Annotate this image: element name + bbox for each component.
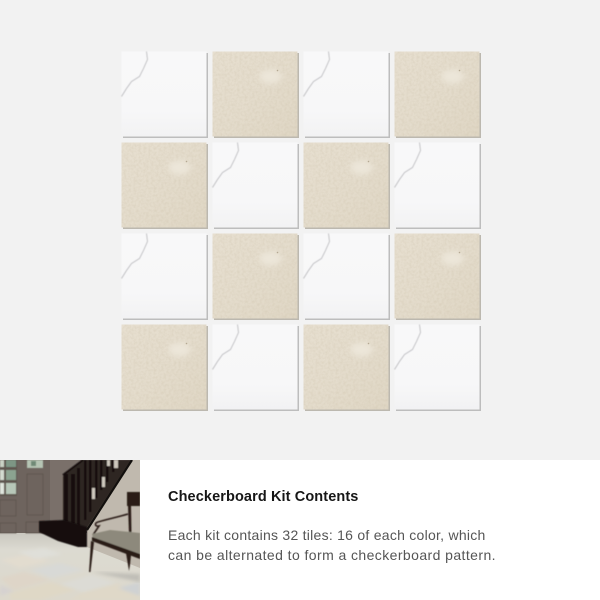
room photo illustration — [0, 460, 140, 600]
newel base platform — [39, 520, 87, 547]
heading: Checkerboard Kit Contents — [168, 489, 358, 505]
chair — [89, 492, 140, 572]
floor — [0, 533, 140, 600]
staircase — [63, 460, 132, 530]
body text: can be alternated to form a checkerboard pattern. — [168, 547, 496, 563]
stair wall light — [87, 460, 140, 568]
text panel — [140, 460, 600, 600]
body text — [168, 527, 496, 563]
tile grid — [121, 51, 481, 411]
door transom — [27, 460, 43, 468]
tile row 4 — [122, 324, 481, 411]
window left — [0, 460, 17, 496]
back wall — [0, 460, 140, 535]
body text: Each kit contains 32 tiles: 16 of each color, which — [168, 527, 486, 543]
door and wainscot panels — [0, 474, 44, 533]
floor checker tiles — [0, 548, 140, 600]
chair floor shadow — [92, 572, 140, 582]
tile row 2 — [122, 142, 481, 229]
handrail — [87, 460, 132, 530]
tile row 1 — [122, 52, 481, 138]
tile row 3 — [122, 234, 481, 320]
